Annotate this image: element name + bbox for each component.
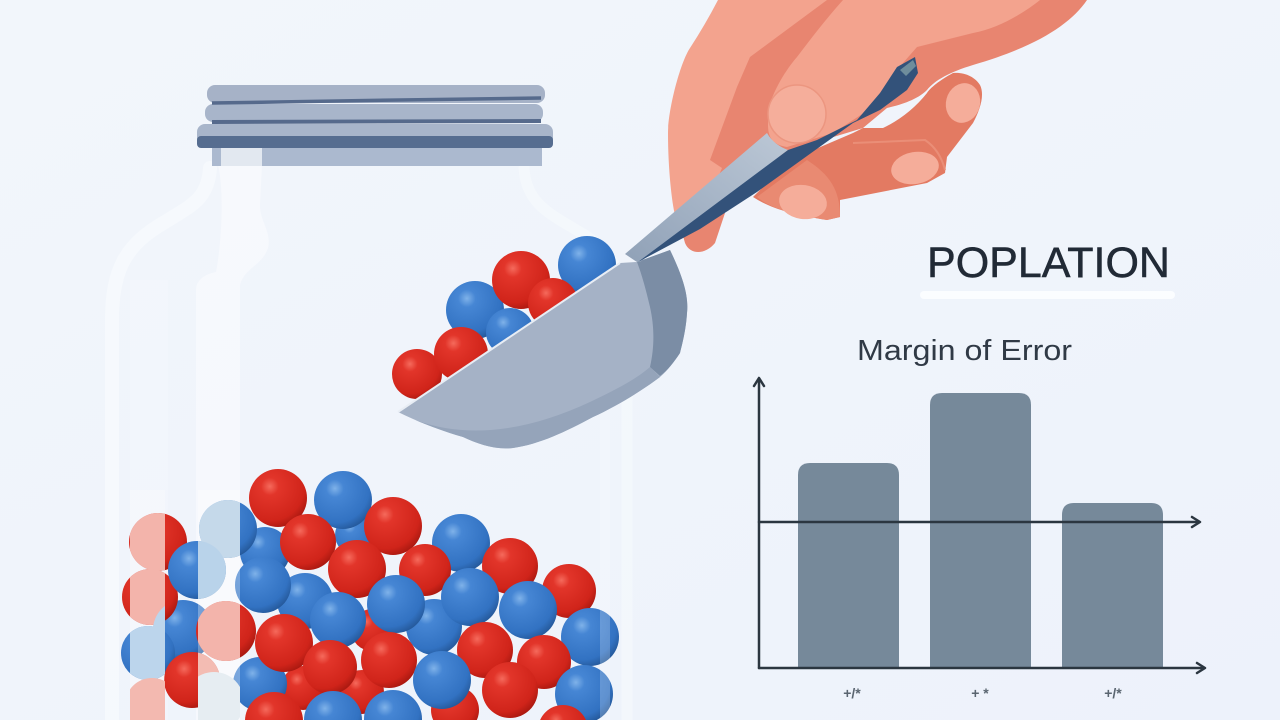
scoop right band	[637, 250, 687, 376]
jar side sheen	[130, 280, 168, 720]
ring fingertip nail	[941, 79, 985, 127]
handle light strip	[625, 133, 788, 262]
handle dark strip	[638, 57, 918, 262]
bars	[798, 393, 1163, 668]
glass reflection on centre marbles	[198, 500, 240, 720]
hand	[668, 0, 1087, 252]
index finger segment	[757, 160, 840, 220]
lower fingers	[753, 73, 982, 220]
jar glass outline	[112, 168, 627, 720]
glass reflection on left marbles	[130, 513, 165, 720]
axes	[754, 378, 1205, 673]
middle finger crease	[853, 140, 945, 170]
jar	[112, 85, 627, 720]
index fingertip nail	[777, 182, 829, 222]
handle tip sheen	[900, 60, 916, 76]
scoop bowl	[398, 250, 687, 448]
little finger tab	[680, 195, 725, 252]
bar chart	[754, 378, 1205, 701]
axis labels: + *	[971, 685, 989, 701]
thumb	[768, 0, 1040, 147]
jar neck band	[212, 148, 542, 166]
back of hand	[668, 0, 827, 220]
axis labels: +/*	[843, 685, 861, 701]
heading underline	[920, 291, 1175, 299]
axis labels: +/*	[1104, 685, 1122, 701]
chart title: Margin of Error	[857, 335, 1072, 367]
marbles in jar	[121, 469, 619, 720]
scoop	[398, 57, 918, 448]
scoop under edge	[415, 367, 660, 448]
glass reflection on right marble	[600, 420, 610, 720]
population heading: POPLATION	[927, 239, 1170, 287]
jar lid	[197, 85, 553, 148]
palm band	[700, 0, 1087, 190]
middle fingertip nail	[889, 148, 941, 188]
thumb nail	[768, 85, 826, 143]
axis labels	[843, 685, 1122, 701]
scoop rim highlight	[398, 263, 620, 412]
jar glass highlight	[196, 165, 269, 720]
scoop marbles	[392, 236, 616, 399]
